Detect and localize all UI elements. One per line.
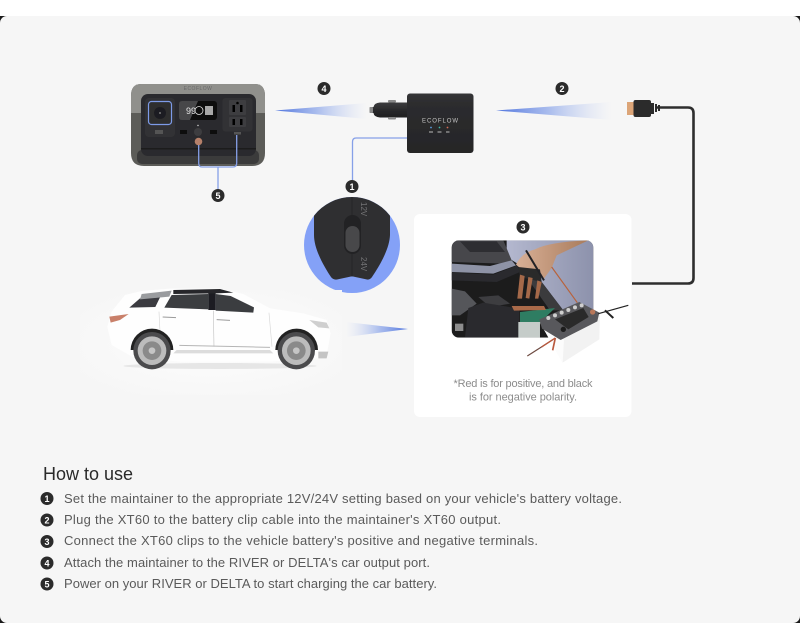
step 3: 3 xyxy=(44,537,50,547)
step 2: 2 xyxy=(44,515,50,525)
icon: maintainer xyxy=(370,94,474,153)
image: white SUV xyxy=(80,289,342,395)
badge: 4 above arrow: 4 xyxy=(321,84,327,94)
image: hand clipping on engine bay xyxy=(452,240,593,338)
icon: power station xyxy=(131,84,265,166)
badge: 4 above arrow xyxy=(318,82,330,95)
icon: 12V/24V selector dial: 24V xyxy=(359,257,368,272)
step 4: 4 xyxy=(44,558,50,568)
badge: 1 above dial: 1 xyxy=(349,182,355,192)
icon: power station: ECOFLOW xyxy=(184,86,212,92)
badge: 1 above dial xyxy=(346,180,358,193)
callout line: step 1 to maintainer xyxy=(352,138,408,180)
icon: car battery xyxy=(527,302,628,363)
badge: 5 on power station: 5 xyxy=(215,191,221,201)
step 1: 1 xyxy=(44,494,50,504)
list: steps xyxy=(40,491,622,591)
step 5: Power on your RIVER or DELTA to start charging the car battery. xyxy=(64,576,437,591)
arrow: maintainer to cable xyxy=(496,102,612,120)
step 3: Connect the XT60 clips to the vehicle battery's positive and negative terminals. xyxy=(64,533,538,548)
callout line: step 5 bracket xyxy=(199,135,237,190)
note: polarity xyxy=(454,378,593,404)
panel: battery clip card xyxy=(414,214,632,417)
badge: 3 in card: 3 xyxy=(520,222,526,232)
step 1: Set the maintainer to the appropriate 12V/24V setting based on your vehicle's battery voltage. xyxy=(64,491,622,506)
step 5: 5 xyxy=(44,579,50,589)
badge: 2 above arrow: 2 xyxy=(559,84,565,94)
icon: 12V/24V selector dial xyxy=(304,197,400,293)
badge: 2 above arrow xyxy=(556,82,568,95)
step 2: Plug the XT60 to the battery clip cable into the maintainer's XT60 output. xyxy=(64,512,501,527)
note: polarity: is for negative polarity. xyxy=(469,392,577,404)
heading: how to use: How to use xyxy=(43,464,133,484)
cable with XT60 connector xyxy=(627,100,694,284)
badge: 3 in card xyxy=(516,220,530,234)
arrow: power station to plug xyxy=(275,103,367,119)
icon: power station: 99 xyxy=(186,106,196,116)
step 4: Attach the maintainer to the RIVER or DELTA's car output port. xyxy=(64,555,430,570)
icon: 12V/24V selector dial: 12V xyxy=(359,202,368,217)
icon: maintainer: ECOFLOW xyxy=(422,118,458,124)
arrow: car to battery card xyxy=(346,322,408,337)
badge: 5 on power station xyxy=(212,189,224,202)
note: polarity: *Red is for positive, and black xyxy=(454,378,593,390)
